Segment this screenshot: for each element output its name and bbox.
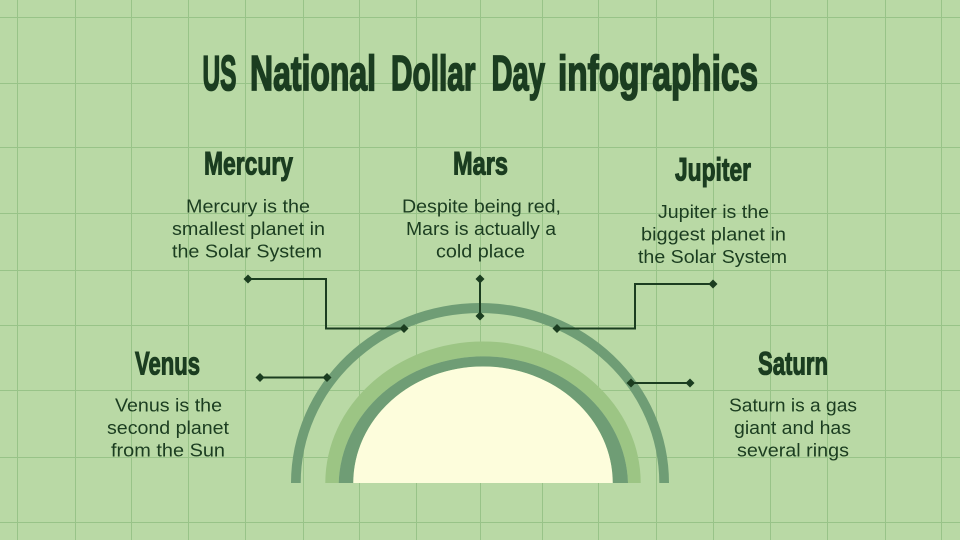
description: Mercury: Mercury is the <box>186 196 310 216</box>
description: Jupiter <box>638 201 787 267</box>
description: Mercury: smallest planet in <box>172 218 325 239</box>
description: Mercury <box>172 196 325 262</box>
heading: Jupiter: Jupiter <box>675 152 751 188</box>
description: Saturn <box>729 394 857 460</box>
title: infographics <box>558 47 758 101</box>
panel: Mars <box>402 146 561 320</box>
connector: Jupiter <box>552 280 718 333</box>
outer ring <box>291 303 669 483</box>
title: Day <box>492 47 545 101</box>
panel: Jupiter <box>552 152 787 333</box>
panel: Mercury <box>172 146 408 333</box>
heading: Venus: Venus <box>135 346 200 382</box>
description: Jupiter: biggest planet in <box>641 224 786 244</box>
title: Dollar <box>391 47 476 101</box>
description: Mars: Mars is actually a <box>406 218 557 239</box>
description: Mars: Despite being red, <box>402 196 561 216</box>
heading: Saturn: Saturn <box>758 346 828 382</box>
connector: Mars <box>476 274 484 320</box>
semicircle rainbow diagram <box>291 303 669 483</box>
connector: Saturn <box>626 378 694 388</box>
title: US <box>202 47 236 101</box>
description: Saturn: Saturn is a gas <box>729 394 857 416</box>
panel: Venus <box>107 346 332 460</box>
title <box>202 47 758 101</box>
description: Jupiter: the Solar System <box>638 246 787 267</box>
description: Mercury: the Solar System <box>172 240 322 262</box>
description: Venus <box>107 394 229 460</box>
description: Jupiter: Jupiter is the <box>658 201 769 222</box>
cream sun centre <box>353 366 613 483</box>
title: National <box>250 47 376 101</box>
description: Venus: Venus is the <box>115 394 222 416</box>
description: Venus: from the Sun <box>111 440 225 460</box>
description: Saturn: several rings <box>737 440 849 460</box>
description: Mars <box>402 196 561 262</box>
panel: Saturn <box>626 346 857 460</box>
description: Saturn: giant and has <box>734 417 851 438</box>
connector: Venus <box>256 373 332 382</box>
heading: Mercury: Mercury <box>204 146 293 182</box>
dark middle ring <box>339 356 628 483</box>
light middle ring <box>325 342 641 483</box>
description: Mars: cold place <box>436 240 525 262</box>
heading: Mars: Mars <box>453 146 508 182</box>
description: Venus: second planet <box>107 417 229 438</box>
connector: Mercury <box>244 274 408 333</box>
